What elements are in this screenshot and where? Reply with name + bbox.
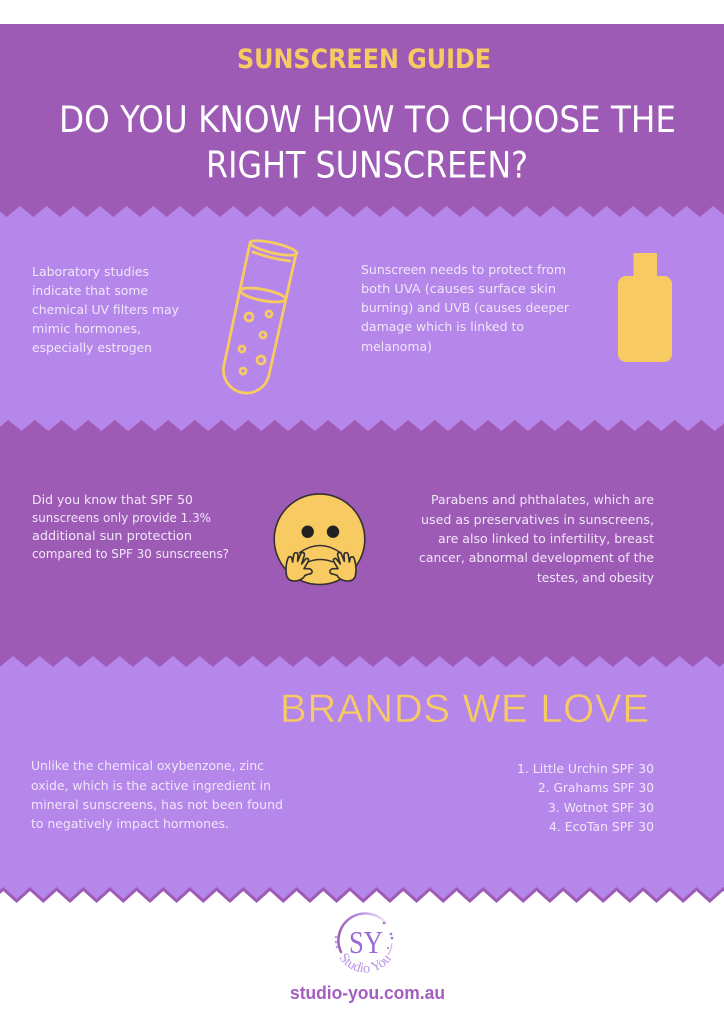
title: RIGHT SUNSCREEN? — [206, 144, 528, 186]
icon: sunscreen bottle — [618, 253, 672, 362]
text block: zinc oxide — [31, 759, 283, 832]
logo: studio you: SY — [349, 924, 383, 960]
logo: studio you: Studio You — [340, 954, 392, 973]
text block: spf 50: Did you know that SPF 50 — [32, 493, 193, 508]
text block: laboratory studies: Laboratory studies — [32, 265, 149, 280]
panel: light band 2 — [0, 656, 724, 905]
text block: laboratory studies: chemical UV filters may — [32, 303, 179, 318]
list: brands: 1. Little Urchin SPF 30 — [517, 762, 654, 777]
text block: uva and uvb: both UVA (causes surface skin — [361, 282, 556, 297]
text block: spf 50: sunscreens only provide 1.3% — [32, 511, 211, 526]
heading: brands we love: BRANDS WE LOVE — [280, 687, 649, 731]
text block: uva and uvb: Sunscreen needs to protect from — [361, 263, 566, 278]
website url: studio-you.com.au — [290, 983, 445, 1003]
text block: uva and uvb: burning) and UVB (causes deeper — [361, 301, 570, 316]
heading: sunscreen guide: SUNSCREEN GUIDE — [237, 44, 491, 75]
icon: right hand — [330, 552, 356, 581]
list: brands — [517, 762, 654, 835]
text block: zinc oxide: mineral sunscreens, has not been found — [31, 798, 283, 813]
text block: laboratory studies — [32, 265, 179, 356]
icon: left hand — [286, 552, 312, 581]
text block: parabens and phthalates: testes, and obesity — [537, 571, 654, 586]
text block: uva and uvb: damage which is linked to — [361, 320, 524, 335]
text block: parabens and phthalates: cancer, abnormal development of the — [419, 551, 654, 566]
panel: light band 1 — [0, 206, 724, 431]
text block: parabens and phthalates: used as preservatives in sunscreens, — [421, 513, 654, 528]
text block: laboratory studies: especially estrogen — [32, 341, 152, 356]
text block: parabens and phthalates: are also linked to infertility, breast — [438, 532, 654, 547]
text block: laboratory studies: indicate that some — [32, 284, 148, 299]
text block: zinc oxide: to negatively impact hormones. — [31, 817, 229, 832]
panel: dark purple band — [0, 24, 724, 684]
icon: worried emoji — [274, 494, 365, 584]
text block: zinc oxide: oxide, which is the active ingredient in — [31, 779, 271, 794]
panel: zigzag footer — [0, 889, 724, 1024]
logo: studio you — [334, 912, 394, 973]
text block: uva and uvb — [361, 263, 570, 355]
title — [59, 98, 676, 186]
text block: spf 50: additional sun protection — [32, 529, 192, 544]
text block: zinc oxide: Unlike the chemical oxybenzone, zinc — [31, 759, 264, 774]
icon: test tube — [223, 238, 298, 393]
text block: parabens and phthalates: Parabens and phthalates, which are — [431, 493, 654, 508]
text block: laboratory studies: mimic hormones, — [32, 322, 141, 337]
text block: uva and uvb: melanoma) — [361, 340, 432, 355]
text block: parabens and phthalates — [419, 493, 654, 586]
list: brands: 4. EcoTan SPF 30 — [549, 820, 654, 835]
text block: spf 50 — [32, 493, 229, 562]
list: brands: 3. Wotnot SPF 30 — [548, 801, 654, 816]
text block: spf 50: compared to SPF 30 sunscreens? — [32, 547, 229, 562]
list: brands: 2. Grahams SPF 30 — [538, 781, 654, 796]
